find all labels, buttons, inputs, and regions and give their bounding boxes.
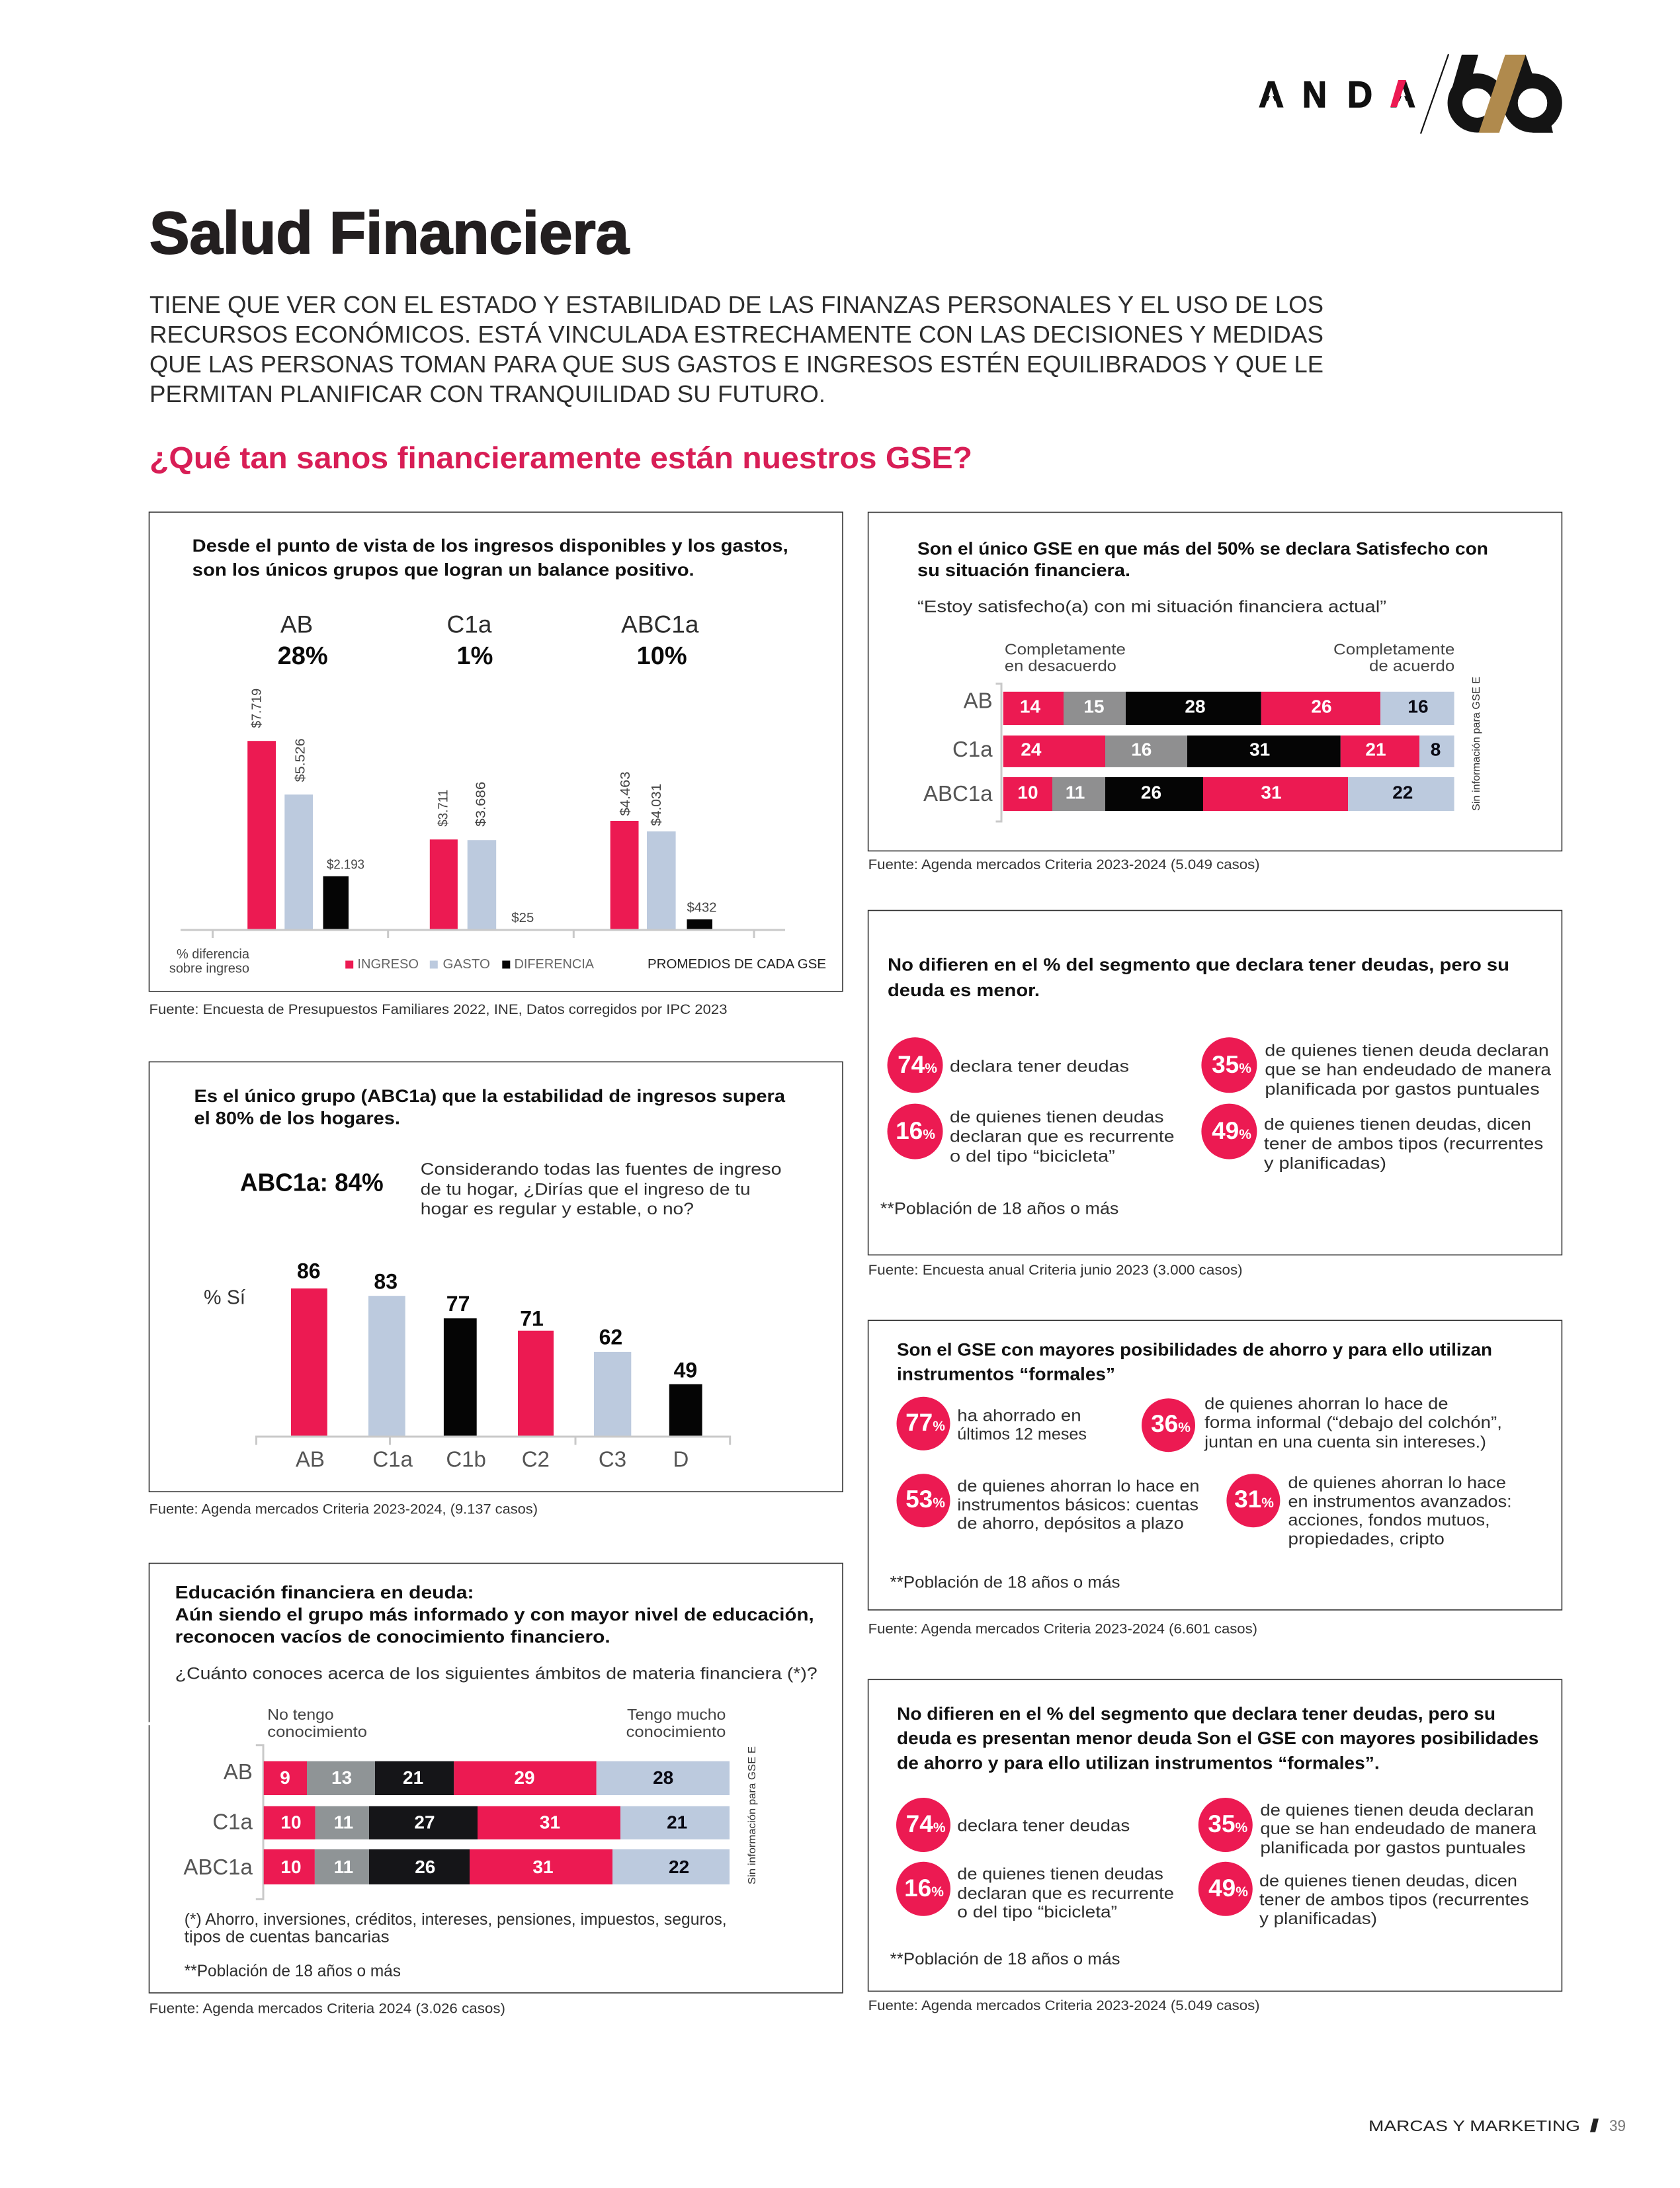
footnote: ámbitos: tipos de cuentas bancarias [185, 1928, 390, 1947]
bar chart: % sí: 83 [374, 1270, 398, 1294]
stat 53% [897, 1474, 1200, 1533]
stacked bar chart: satisfacción: 22 [1392, 782, 1413, 803]
stat 77%: ha ahorrado en [957, 1406, 1081, 1425]
scale labels: de acuerdo [1369, 657, 1454, 675]
stat 35%: 35% [1212, 1051, 1251, 1078]
panel heading [917, 538, 1488, 580]
axis label: % Sí [204, 1286, 245, 1309]
stat 49%: tener de ambos tipos (recurrentes [1264, 1134, 1543, 1153]
stat 74% [896, 1798, 1130, 1852]
panel: satisfacción financiera [868, 512, 1562, 851]
stacked bar chart: satisfacción: ABC1a [923, 781, 993, 806]
stat 77% [897, 1397, 1087, 1451]
bar chart: ingreso gasto diferencia: $4.031 [650, 784, 664, 826]
panel heading [897, 1339, 1492, 1384]
stacked bar chart: satisfacción: 31 [1261, 782, 1282, 803]
side note: Sin información para GSE E [1471, 677, 1482, 811]
stacked bar chart: conocimiento: 11 [334, 1812, 353, 1832]
bar chart: ingreso gasto diferencia [181, 689, 785, 938]
footnote: ámbitos [185, 1910, 727, 1947]
panel heading: Desde el punto de vista de los ingresos disponibles y los gastos, [192, 536, 788, 556]
stacked bar chart: satisfacción: 10 [1017, 782, 1038, 803]
stacked bar chart: satisfacción: 24 [1021, 739, 1042, 760]
stacked bar chart: satisfacción: AB [964, 689, 993, 713]
logo wordmark ANDA [1259, 73, 1415, 115]
stat 35%: que se han endeudado de manera [1265, 1061, 1551, 1079]
group percentages: C1a [447, 610, 492, 638]
bar chart: % sí [257, 1259, 730, 1472]
stacked bar chart: conocimiento: 21 [403, 1767, 423, 1788]
panel heading: No difieren en el % del segmento que declara tener deudas, pero su [897, 1704, 1495, 1724]
stat 36%: juntan en una cuenta sin intereses.) [1204, 1433, 1486, 1451]
stat 49%: de quienes tienen deudas, dicen [1264, 1115, 1531, 1134]
source: Fuente: Agenda mercados Criteria 2023-2024 (5.049 casos) [868, 1998, 1260, 2013]
legend: GASTO [443, 957, 490, 972]
key figure: ABC1a: 84% [240, 1169, 384, 1197]
panel heading: son los únicos grupos que logran un balance positivo. [192, 560, 694, 580]
source: Fuente: Agenda mercados Criteria 2024 (3.026 casos) [149, 2001, 505, 2017]
intro text: TIENE QUE VER CON EL ESTADO Y ESTABILIDAD DE LAS FINANZAS PERSONALES Y EL USO DE LOS [149, 291, 1323, 318]
panel heading [192, 536, 788, 580]
title: Salud Financiera [149, 200, 630, 267]
stat 49%: 49% [1208, 1874, 1248, 1902]
stat 16%: 16% [896, 1117, 935, 1144]
stacked bar chart: satisfacción: 26 [1141, 782, 1161, 803]
footnote: población: **Población de 18 años o más [185, 1962, 401, 1980]
stat 16% [896, 1862, 1174, 1921]
stat 35%: planificada por gastos puntuales [1265, 1080, 1540, 1099]
logo wordmark ANDA: A [1259, 73, 1284, 115]
logo: ANDA 66 [1259, 54, 1554, 134]
stacked bar chart: conocimiento: AB [224, 1759, 253, 1784]
stat 74%: declara tener deudas [950, 1058, 1129, 1076]
stacked bar chart: conocimiento: C1a [212, 1809, 253, 1833]
footnote: **Población de 18 años o más [890, 1950, 1120, 1968]
stat 35% [1198, 1798, 1536, 1857]
bar chart: % sí: C2 [522, 1447, 550, 1472]
bar chart: % sí: C1a [372, 1447, 413, 1472]
bar chart: % sí: C3 [599, 1447, 626, 1472]
stat 49%: de quienes tienen deudas, dicen [1259, 1872, 1517, 1890]
group percentages: 10% [637, 642, 687, 670]
stat 36%: forma informal (“debajo del colchón”, [1204, 1413, 1502, 1432]
group percentages: AB [280, 610, 313, 638]
panel heading: reconocen vacíos de conocimiento financiero. [175, 1627, 610, 1647]
stacked bar chart: satisfacción: 26 [1311, 696, 1332, 717]
stat 16%: 16% [904, 1874, 944, 1902]
stat 36%: 36% [1151, 1410, 1191, 1437]
stat 31% [1226, 1474, 1512, 1548]
group percentages [278, 610, 699, 670]
side note: Sin información para GSE E [747, 1746, 758, 1884]
panel heading: Son el único GSE en que más del 50% se declara Satisfecho con [917, 538, 1488, 558]
bar chart: % sí: 71 [520, 1306, 544, 1330]
scale labels: en desacuerdo [1005, 657, 1116, 675]
axis caption: sobre ingreso [169, 962, 249, 976]
bar chart: % sí: 86 [297, 1259, 321, 1283]
footnote: **Población de 18 años o más [890, 1574, 1120, 1592]
panel heading: Educación financiera en deuda: [175, 1583, 474, 1603]
footer: 39 [1609, 2117, 1626, 2135]
stat 16%: de quienes tienen deudas [950, 1108, 1164, 1126]
stat 74% [888, 1037, 1129, 1093]
stacked bar chart: satisfacción: 14 [1020, 696, 1040, 717]
stat 49%: y planificadas) [1259, 1910, 1377, 1928]
stat 49%: 49% [1212, 1117, 1251, 1144]
stat 49% [1201, 1104, 1543, 1173]
bar chart: ingreso gasto diferencia: $5.526 [294, 738, 308, 782]
source: Fuente: Agenda mercados Criteria 2023-2024 (5.049 casos) [868, 857, 1260, 872]
scale labels [267, 1706, 726, 1740]
bar chart: ingreso gasto diferencia: $3.686 [474, 782, 488, 827]
panel heading: instrumentos “formales” [897, 1365, 1115, 1384]
question [421, 1160, 782, 1218]
bar chart: % sí: C1b [446, 1447, 486, 1472]
panel heading [888, 955, 1509, 1000]
stat 49% [1198, 1862, 1529, 1928]
panel heading: el 80% de los hogares. [194, 1108, 400, 1128]
panel heading: deuda es menor. [888, 980, 1040, 1000]
panel heading: Aún siendo el grupo más informado y con mayor nivel de educación, [175, 1605, 814, 1624]
scale labels: Completamente [1333, 641, 1454, 658]
stacked bar chart: conocimiento: 26 [415, 1857, 435, 1877]
stat 53%: instrumentos básicos: cuentas [957, 1495, 1198, 1514]
stat 74%: 74% [898, 1051, 937, 1078]
section heading: ¿Qué tan sanos financieramente están nuestros GSE? [149, 441, 972, 475]
question: “Estoy satisfecho(a) con mi situación financiera actual” [917, 598, 1386, 616]
scale labels: Completamente [1005, 641, 1126, 658]
bar chart: ingreso gasto diferencia: $4.463 [618, 771, 633, 816]
stat 36%: de quienes ahorran lo hace de [1204, 1395, 1449, 1413]
bar chart: % sí: 49 [674, 1359, 697, 1382]
stat 35%: planificada por gastos puntuales [1260, 1839, 1526, 1857]
panel heading: Son el GSE con mayores posibilidades de ahorro y para ello utilizan [897, 1339, 1492, 1359]
stacked bar chart: conocimiento: 31 [540, 1812, 560, 1832]
panel: estabilidad de ingresos [149, 1062, 843, 1492]
bar chart: ingreso gasto diferencia: $2.193 [327, 858, 364, 872]
panel heading: su situación financiera. [917, 560, 1130, 580]
stat 74%: declara tener deudas [957, 1817, 1130, 1835]
stat 77%: últimos 12 meses [957, 1425, 1087, 1444]
stat 31%: de quienes ahorran lo hace [1288, 1474, 1506, 1492]
stat 16%: o del tipo “bicicleta” [957, 1903, 1117, 1921]
panel heading [175, 1583, 814, 1647]
panel heading: No difieren en el % del segmento que declara tener deudas, pero su [888, 955, 1509, 975]
logo wordmark ANDA: A [1390, 73, 1415, 115]
stacked bar chart: conocimiento: 21 [667, 1812, 687, 1832]
group percentages: 28% [278, 642, 328, 670]
group percentages: 1% [456, 642, 493, 670]
stacked bar chart: conocimiento: 13 [331, 1767, 352, 1788]
stacked bar chart: conocimiento: 22 [669, 1857, 689, 1877]
source: Fuente: Encuesta de Presupuestos Familiares 2022, INE, Datos corregidos por IPC 2023 [149, 1002, 728, 1017]
stacked bar chart: conocimiento: 31 [532, 1857, 554, 1877]
panel heading [194, 1086, 786, 1128]
stat 53%: 53% [905, 1486, 945, 1513]
scale labels: conocimiento [626, 1723, 726, 1740]
stacked bar chart: satisfacción: 28 [1185, 696, 1206, 717]
stat 35%: de quienes tienen deuda declaran [1260, 1801, 1534, 1820]
panel: ingresos y gastos [149, 512, 843, 991]
bar chart: % sí: AB [296, 1447, 325, 1472]
bar chart: % sí: 62 [599, 1325, 622, 1349]
panel heading [897, 1704, 1538, 1773]
stacked bar chart: satisfacción: 31 [1249, 739, 1270, 760]
axis caption: % diferencia [177, 947, 250, 962]
logo wordmark ANDA: D [1347, 73, 1372, 115]
stat 31%: propiedades, cripto [1288, 1530, 1445, 1548]
source: Fuente: Agenda mercados Criteria 2023-2024 (6.601 casos) [868, 1621, 1257, 1636]
stat 35%: de quienes tienen deuda declaran [1265, 1041, 1549, 1060]
bar chart: % sí: D [673, 1447, 689, 1472]
panel: deudas y ahorro [868, 1679, 1562, 1991]
stat 49%: tener de ambos tipos (recurrentes [1259, 1891, 1529, 1910]
footnote: ámbitos: (*) Ahorro, inversiones, créditos, intereses, pensiones, impuestos, seguros, [185, 1910, 727, 1929]
stacked bar chart: conocimiento: 27 [414, 1812, 435, 1832]
logo emblem 66 [1448, 55, 1554, 133]
legend [345, 957, 595, 972]
stat 35%: que se han endeudado de manera [1260, 1820, 1536, 1838]
legend: DIFERENCIA [515, 957, 595, 972]
scale labels: conocimiento [267, 1723, 367, 1740]
axis caption [169, 947, 250, 976]
stat 53%: de quienes ahorran lo hace en [957, 1477, 1200, 1495]
footnote: **Población de 18 años o más [880, 1200, 1118, 1218]
stacked bar chart: satisfacción [923, 684, 1454, 821]
stat 31%: en instrumentos avanzados: [1288, 1492, 1512, 1511]
stat 16%: declaran que es recurrente [957, 1884, 1174, 1903]
logo divider slash [1421, 54, 1449, 134]
source: Fuente: Encuesta anual Criteria junio 2023 (3.000 casos) [868, 1263, 1243, 1278]
stat 16%: declaran que es recurrente [950, 1128, 1175, 1146]
legend: INGRESO [357, 957, 419, 972]
stat 53%: de ahorro, depósitos a plazo [957, 1515, 1184, 1533]
stat 16%: o del tipo “bicicleta” [950, 1147, 1115, 1165]
stat 77%: 77% [905, 1409, 945, 1436]
stacked bar chart: conocimiento: 10 [280, 1857, 302, 1877]
stat 16%: de quienes tienen deudas [957, 1865, 1163, 1884]
bar chart: ingreso gasto diferencia: $3.711 [437, 790, 451, 827]
question: ¿Cuánto conoces acerca de los siguientes ámbitos de materia financiera (*)? [175, 1664, 818, 1683]
stacked bar chart: conocimiento [183, 1746, 730, 1899]
stat 16% [888, 1104, 1175, 1165]
source: Fuente: Agenda mercados Criteria 2023-2024, (9.137 casos) [149, 1501, 538, 1517]
stacked bar chart: conocimiento: 11 [334, 1857, 353, 1877]
bar chart: % sí: 77 [446, 1292, 470, 1316]
bar chart: ingreso gasto diferencia: $25 [511, 911, 534, 925]
intro text: RECURSOS ECONÓMICOS. ESTÁ VINCULADA ESTRECHAMENTE CON LAS DECISIONES Y MEDIDAS [149, 321, 1323, 348]
bar chart: ingreso gasto diferencia: $432 [687, 900, 717, 915]
stat 35%: 35% [1208, 1810, 1248, 1837]
stacked bar chart: conocimiento: 9 [280, 1767, 290, 1788]
intro text: PERMITAN PLANIFICAR CON TRANQUILIDAD SU FUTURO. [149, 380, 825, 407]
stacked bar chart: satisfacción: 16 [1131, 739, 1152, 760]
scale labels: Tengo mucho [627, 1706, 726, 1723]
stacked bar chart: conocimiento: ABC1a [183, 1855, 253, 1879]
panel heading: Es el único grupo (ABC1a) que la estabilidad de ingresos supera [194, 1086, 786, 1106]
note: promedios: PROMEDIOS DE CADA GSE [648, 957, 826, 972]
question: de tu hogar, ¿Dirías que el ingreso de tu [421, 1180, 751, 1199]
stacked bar chart: satisfacción: 8 [1431, 739, 1441, 760]
stacked bar chart: satisfacción: 11 [1066, 782, 1085, 803]
stacked bar chart: satisfacción: 21 [1365, 739, 1386, 760]
panel heading: deuda es presentan menor deuda Son el GSE con mayores posibilidades [897, 1728, 1538, 1748]
logo wordmark ANDA: N [1302, 73, 1327, 115]
stacked bar chart: conocimiento: 29 [514, 1767, 535, 1788]
stacked bar chart: satisfacción: 15 [1083, 696, 1105, 717]
stat 36% [1142, 1395, 1502, 1452]
stat 35% [1201, 1037, 1551, 1099]
scale labels [1005, 641, 1454, 675]
stat 74%: 74% [906, 1810, 946, 1837]
panel: deudas [868, 910, 1562, 1255]
panel heading: de ahorro y para ello utilizan instrumentos “formales”. [897, 1753, 1380, 1773]
panel: ahorro [868, 1320, 1562, 1610]
stat 49%: y planificadas) [1264, 1154, 1386, 1173]
intro text: QUE LAS PERSONAS TOMAN PARA QUE SUS GASTOS E INGRESOS ESTÉN EQUILIBRADOS Y QUE LE [149, 351, 1323, 378]
question: hogar es regular y estable, o no? [421, 1200, 694, 1218]
stacked bar chart: satisfacción: C1a [952, 737, 993, 761]
stacked bar chart: conocimiento: 28 [653, 1767, 673, 1788]
stat 31%: 31% [1234, 1486, 1274, 1513]
group percentages: ABC1a [621, 610, 699, 638]
intro text [149, 291, 1323, 407]
question: Considerando todas las fuentes de ingreso [421, 1160, 782, 1179]
panel: educación financiera [147, 1564, 843, 1993]
footer [1368, 2117, 1626, 2135]
scale labels: No tengo [267, 1706, 334, 1723]
stat 31%: acciones, fondos mutuos, [1288, 1511, 1490, 1530]
stacked bar chart: conocimiento: 10 [280, 1812, 302, 1832]
bar chart: ingreso gasto diferencia: $7.719 [250, 689, 265, 728]
stacked bar chart: satisfacción: 16 [1407, 696, 1429, 717]
footer: MARCAS Y MARKETING [1368, 2117, 1580, 2134]
